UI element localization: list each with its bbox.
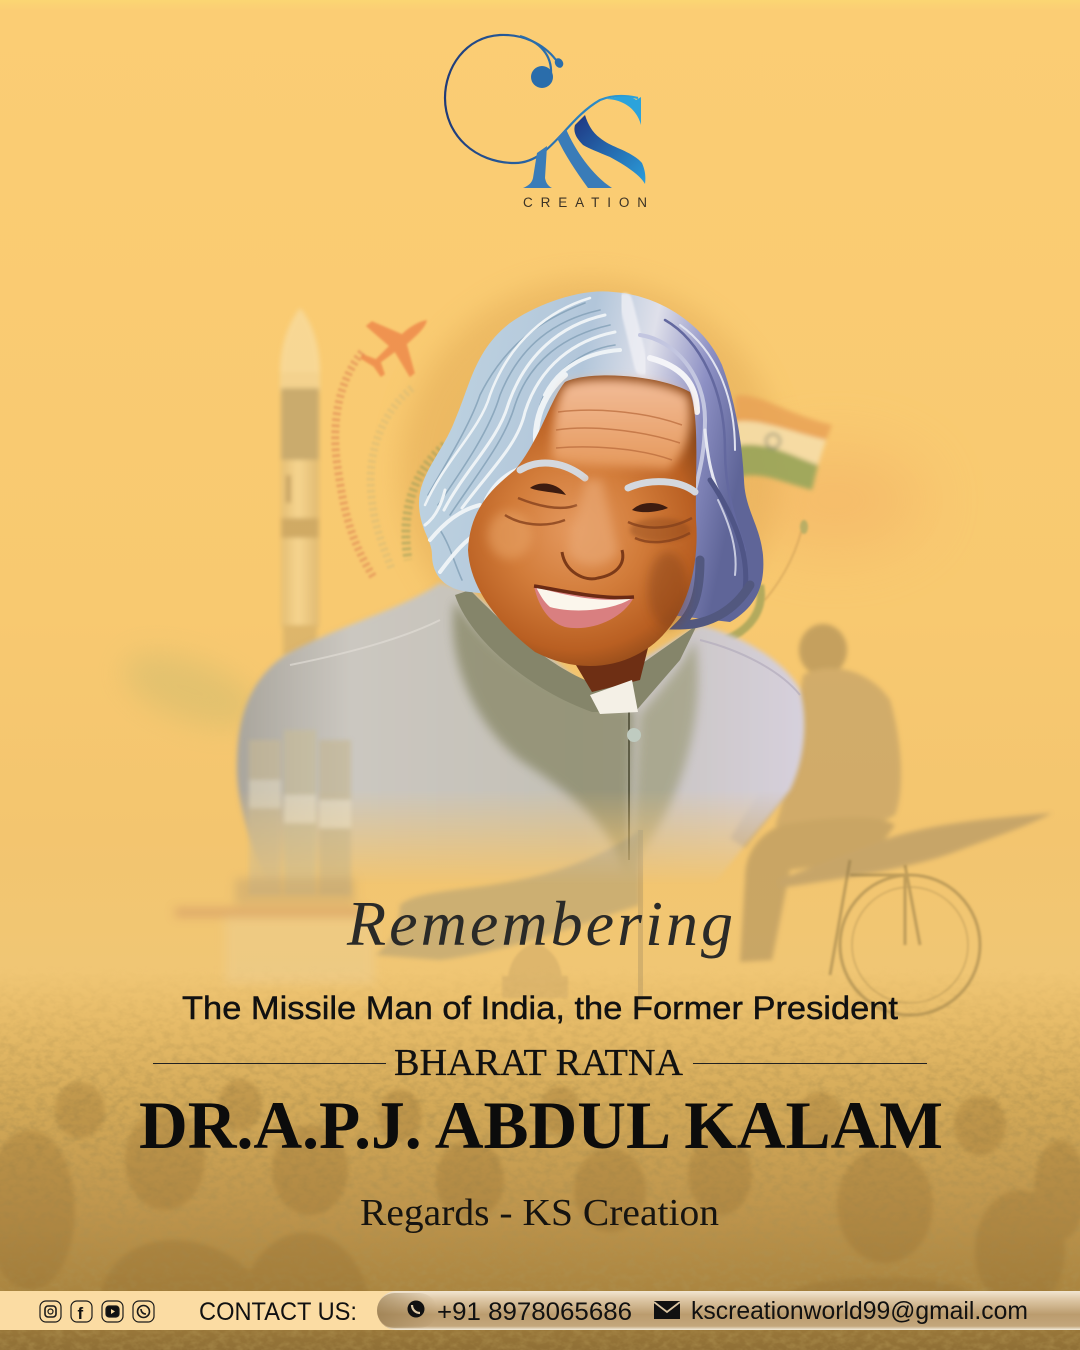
cheek shadow xyxy=(648,552,688,628)
man on bicycle silhouette xyxy=(730,624,1052,962)
icon: instagram xyxy=(40,1301,61,1322)
icon: facebook: f xyxy=(78,1304,84,1323)
face xyxy=(468,375,697,666)
logo C arc xyxy=(445,35,638,163)
green flag smear left xyxy=(114,638,266,742)
regards line: Regards - KS Creation xyxy=(360,1192,719,1234)
script heading: Remembering xyxy=(346,888,733,959)
indian flag behind name xyxy=(375,830,640,960)
crowd texture xyxy=(0,965,1080,1350)
eyes xyxy=(505,484,692,542)
plane icon xyxy=(361,321,426,376)
neck xyxy=(576,648,648,692)
cheek highlights xyxy=(488,511,532,559)
contact pill xyxy=(377,1291,1080,1330)
background scene xyxy=(114,280,1052,1015)
smoke trails xyxy=(335,352,445,578)
nose xyxy=(562,480,623,579)
flag pole xyxy=(638,830,643,1010)
crowd heads xyxy=(0,1079,1080,1310)
phone number: +91 8978065686 xyxy=(437,1298,632,1326)
forehead highlight xyxy=(552,379,691,470)
launch rockets over jacket xyxy=(249,730,351,895)
mouth xyxy=(534,586,634,628)
icon: whatsapp xyxy=(133,1301,154,1322)
soft shadow glow around portrait xyxy=(400,280,780,660)
logo wordmark: CREATION xyxy=(523,195,647,210)
email address: kscreationworld99@gmail.com xyxy=(691,1297,1028,1325)
logo K xyxy=(523,129,612,188)
jacket front shadow xyxy=(453,600,634,880)
orange smear right xyxy=(745,450,925,550)
logo note xyxy=(520,36,565,88)
rashtrapati bhavan dome xyxy=(502,942,568,998)
social icons xyxy=(40,1301,154,1323)
forehead wrinkles xyxy=(556,410,682,460)
rocket launching xyxy=(280,308,320,655)
hair xyxy=(419,291,763,622)
contact bar xyxy=(0,1291,1080,1330)
launch pad xyxy=(175,878,375,984)
crowd xyxy=(0,965,1080,1350)
hair strands xyxy=(425,298,750,625)
eyebrows xyxy=(520,463,695,492)
bicycle wheel xyxy=(830,860,980,1015)
subtitle: The Missile Man of India, the Former President xyxy=(182,990,898,1026)
jacket collar xyxy=(455,590,697,712)
jacket xyxy=(237,583,804,910)
indian flag xyxy=(735,395,832,490)
contact label: CONTACT US: xyxy=(199,1298,357,1326)
ashoka wheel balloon and wreath xyxy=(725,520,808,640)
bar background xyxy=(0,1291,1080,1330)
portrait xyxy=(175,291,804,998)
icon: mail xyxy=(654,1301,680,1319)
logo: KS Creation xyxy=(445,35,647,210)
logo S xyxy=(574,96,645,184)
icon: phone xyxy=(408,1300,424,1318)
award line: BHARAT RATNA xyxy=(394,1042,684,1084)
main name: DR.A.P.J. ABDUL KALAM xyxy=(139,1087,943,1163)
icon: youtube xyxy=(102,1301,123,1322)
